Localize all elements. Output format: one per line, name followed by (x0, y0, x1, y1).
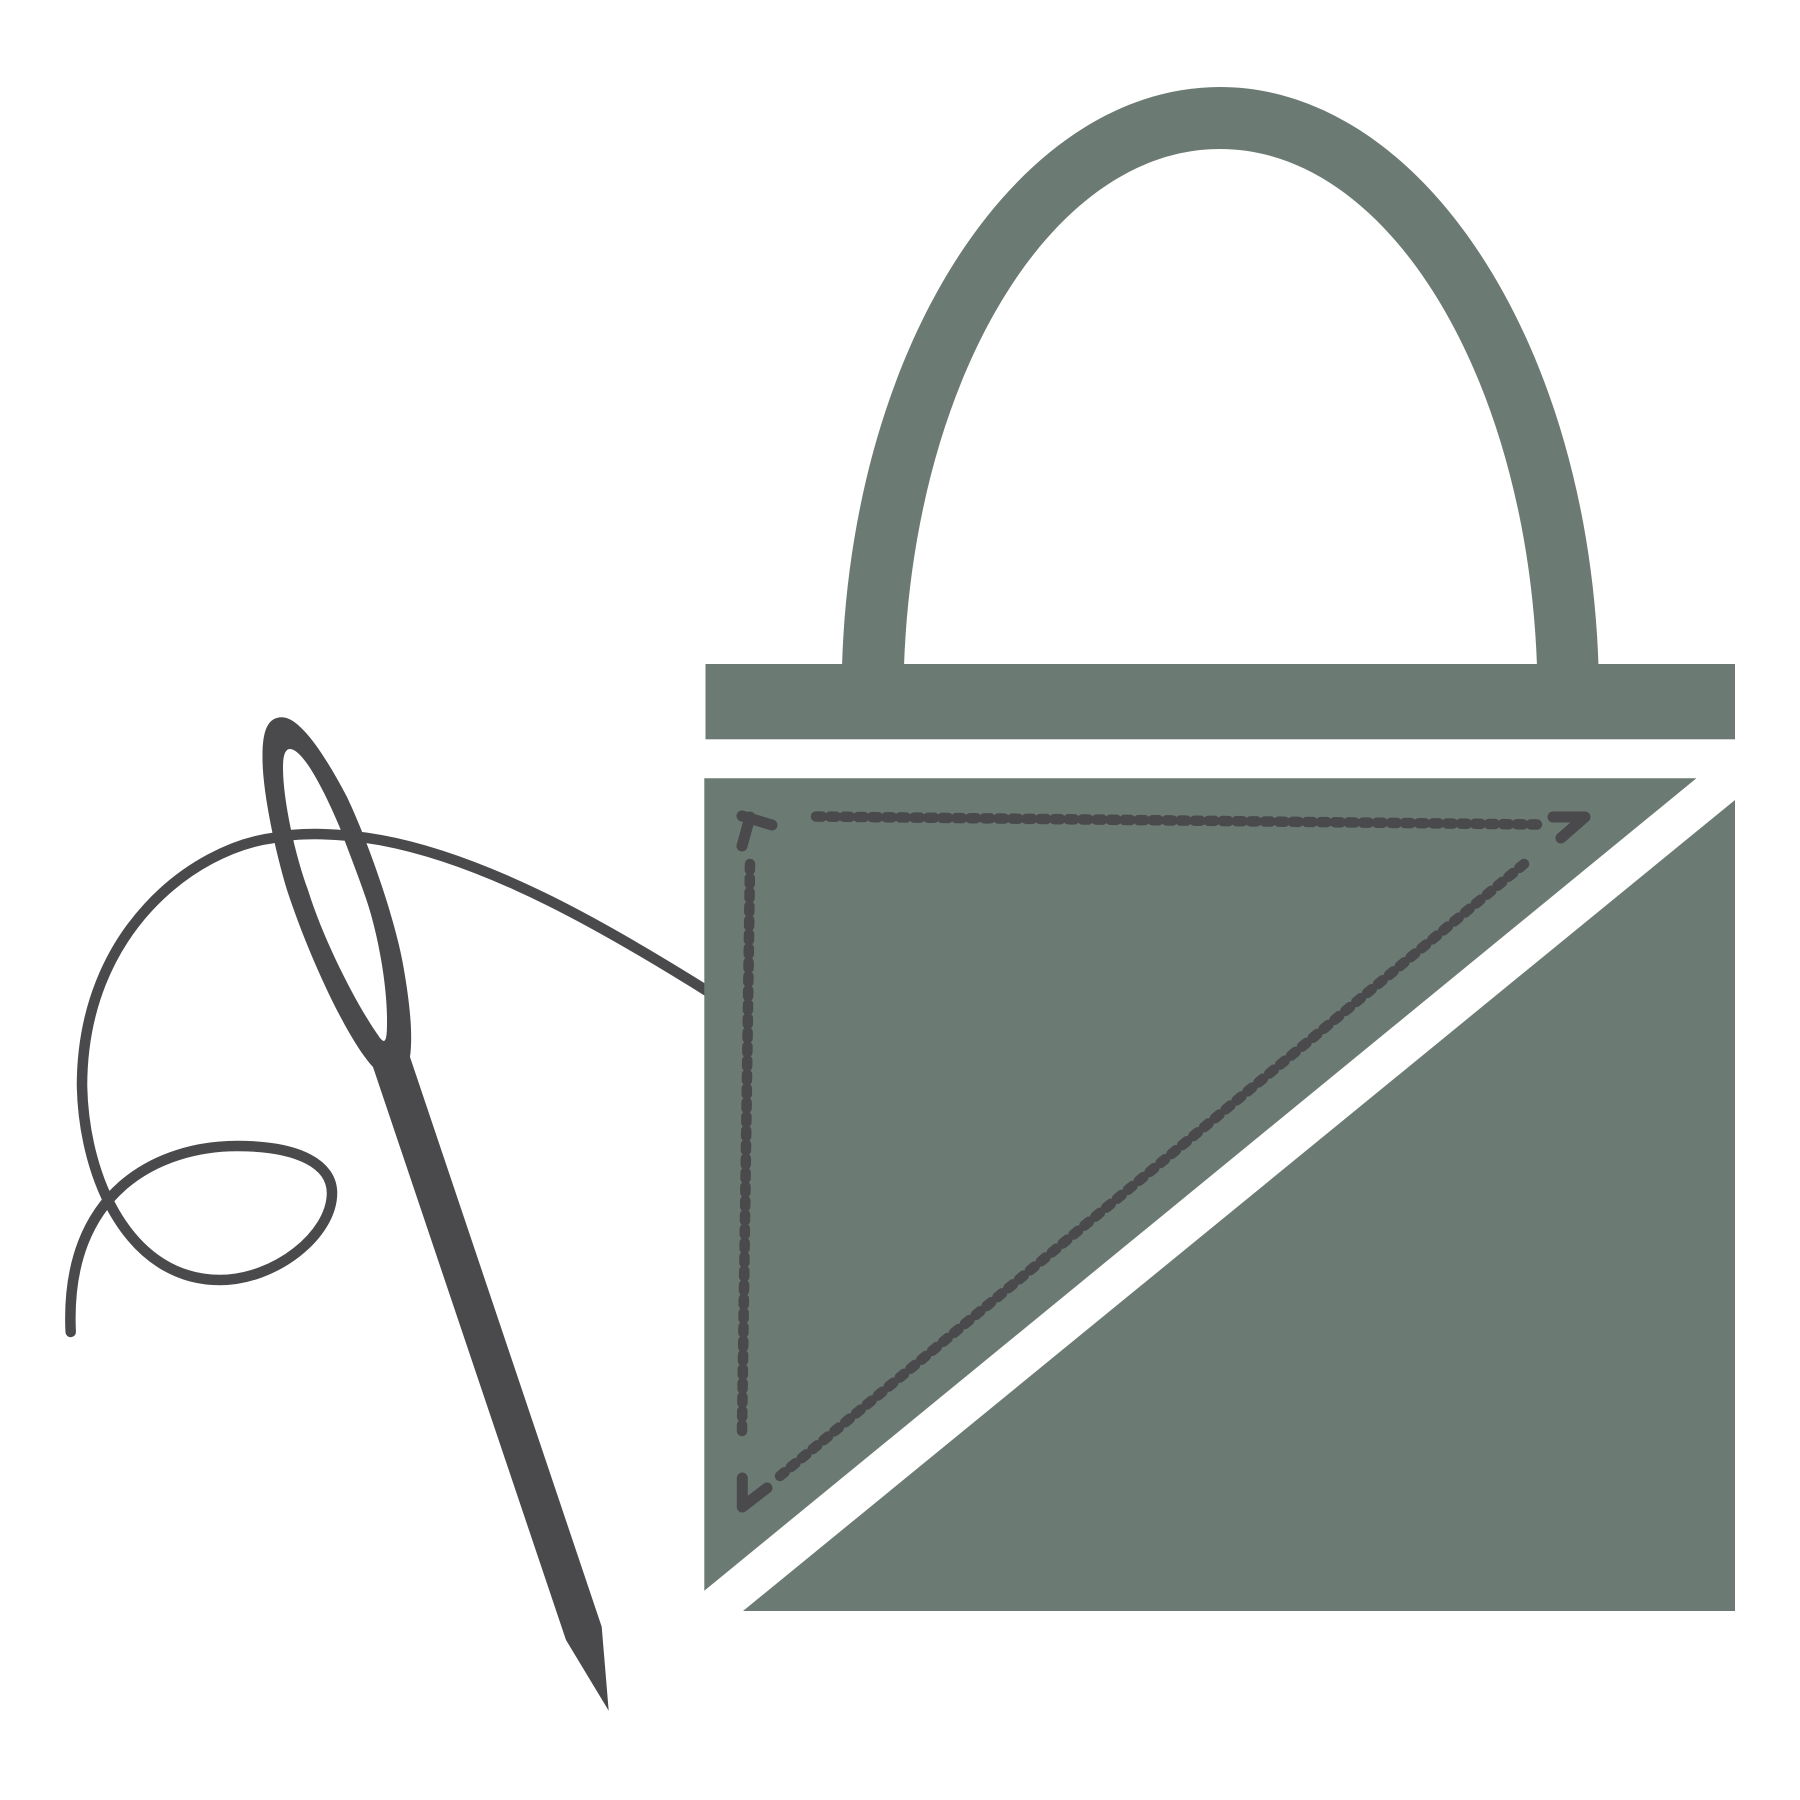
stitches: diagonal line (780, 864, 1524, 1476)
stitches: top-left corner (742, 816, 772, 846)
bag lower panel: lower-right triangle (743, 800, 1735, 1611)
needle (262, 717, 609, 1711)
thread (70, 834, 712, 1332)
stitches: top-right corner (1553, 817, 1585, 838)
stitches: bottom-left corner (742, 1478, 767, 1507)
stitches: left line (742, 864, 750, 1431)
bag handle (842, 87, 1598, 666)
bag lower panel: upper-left triangle (704, 778, 1696, 1591)
bag top band (706, 664, 1735, 739)
stitches: top line (816, 816, 1537, 824)
